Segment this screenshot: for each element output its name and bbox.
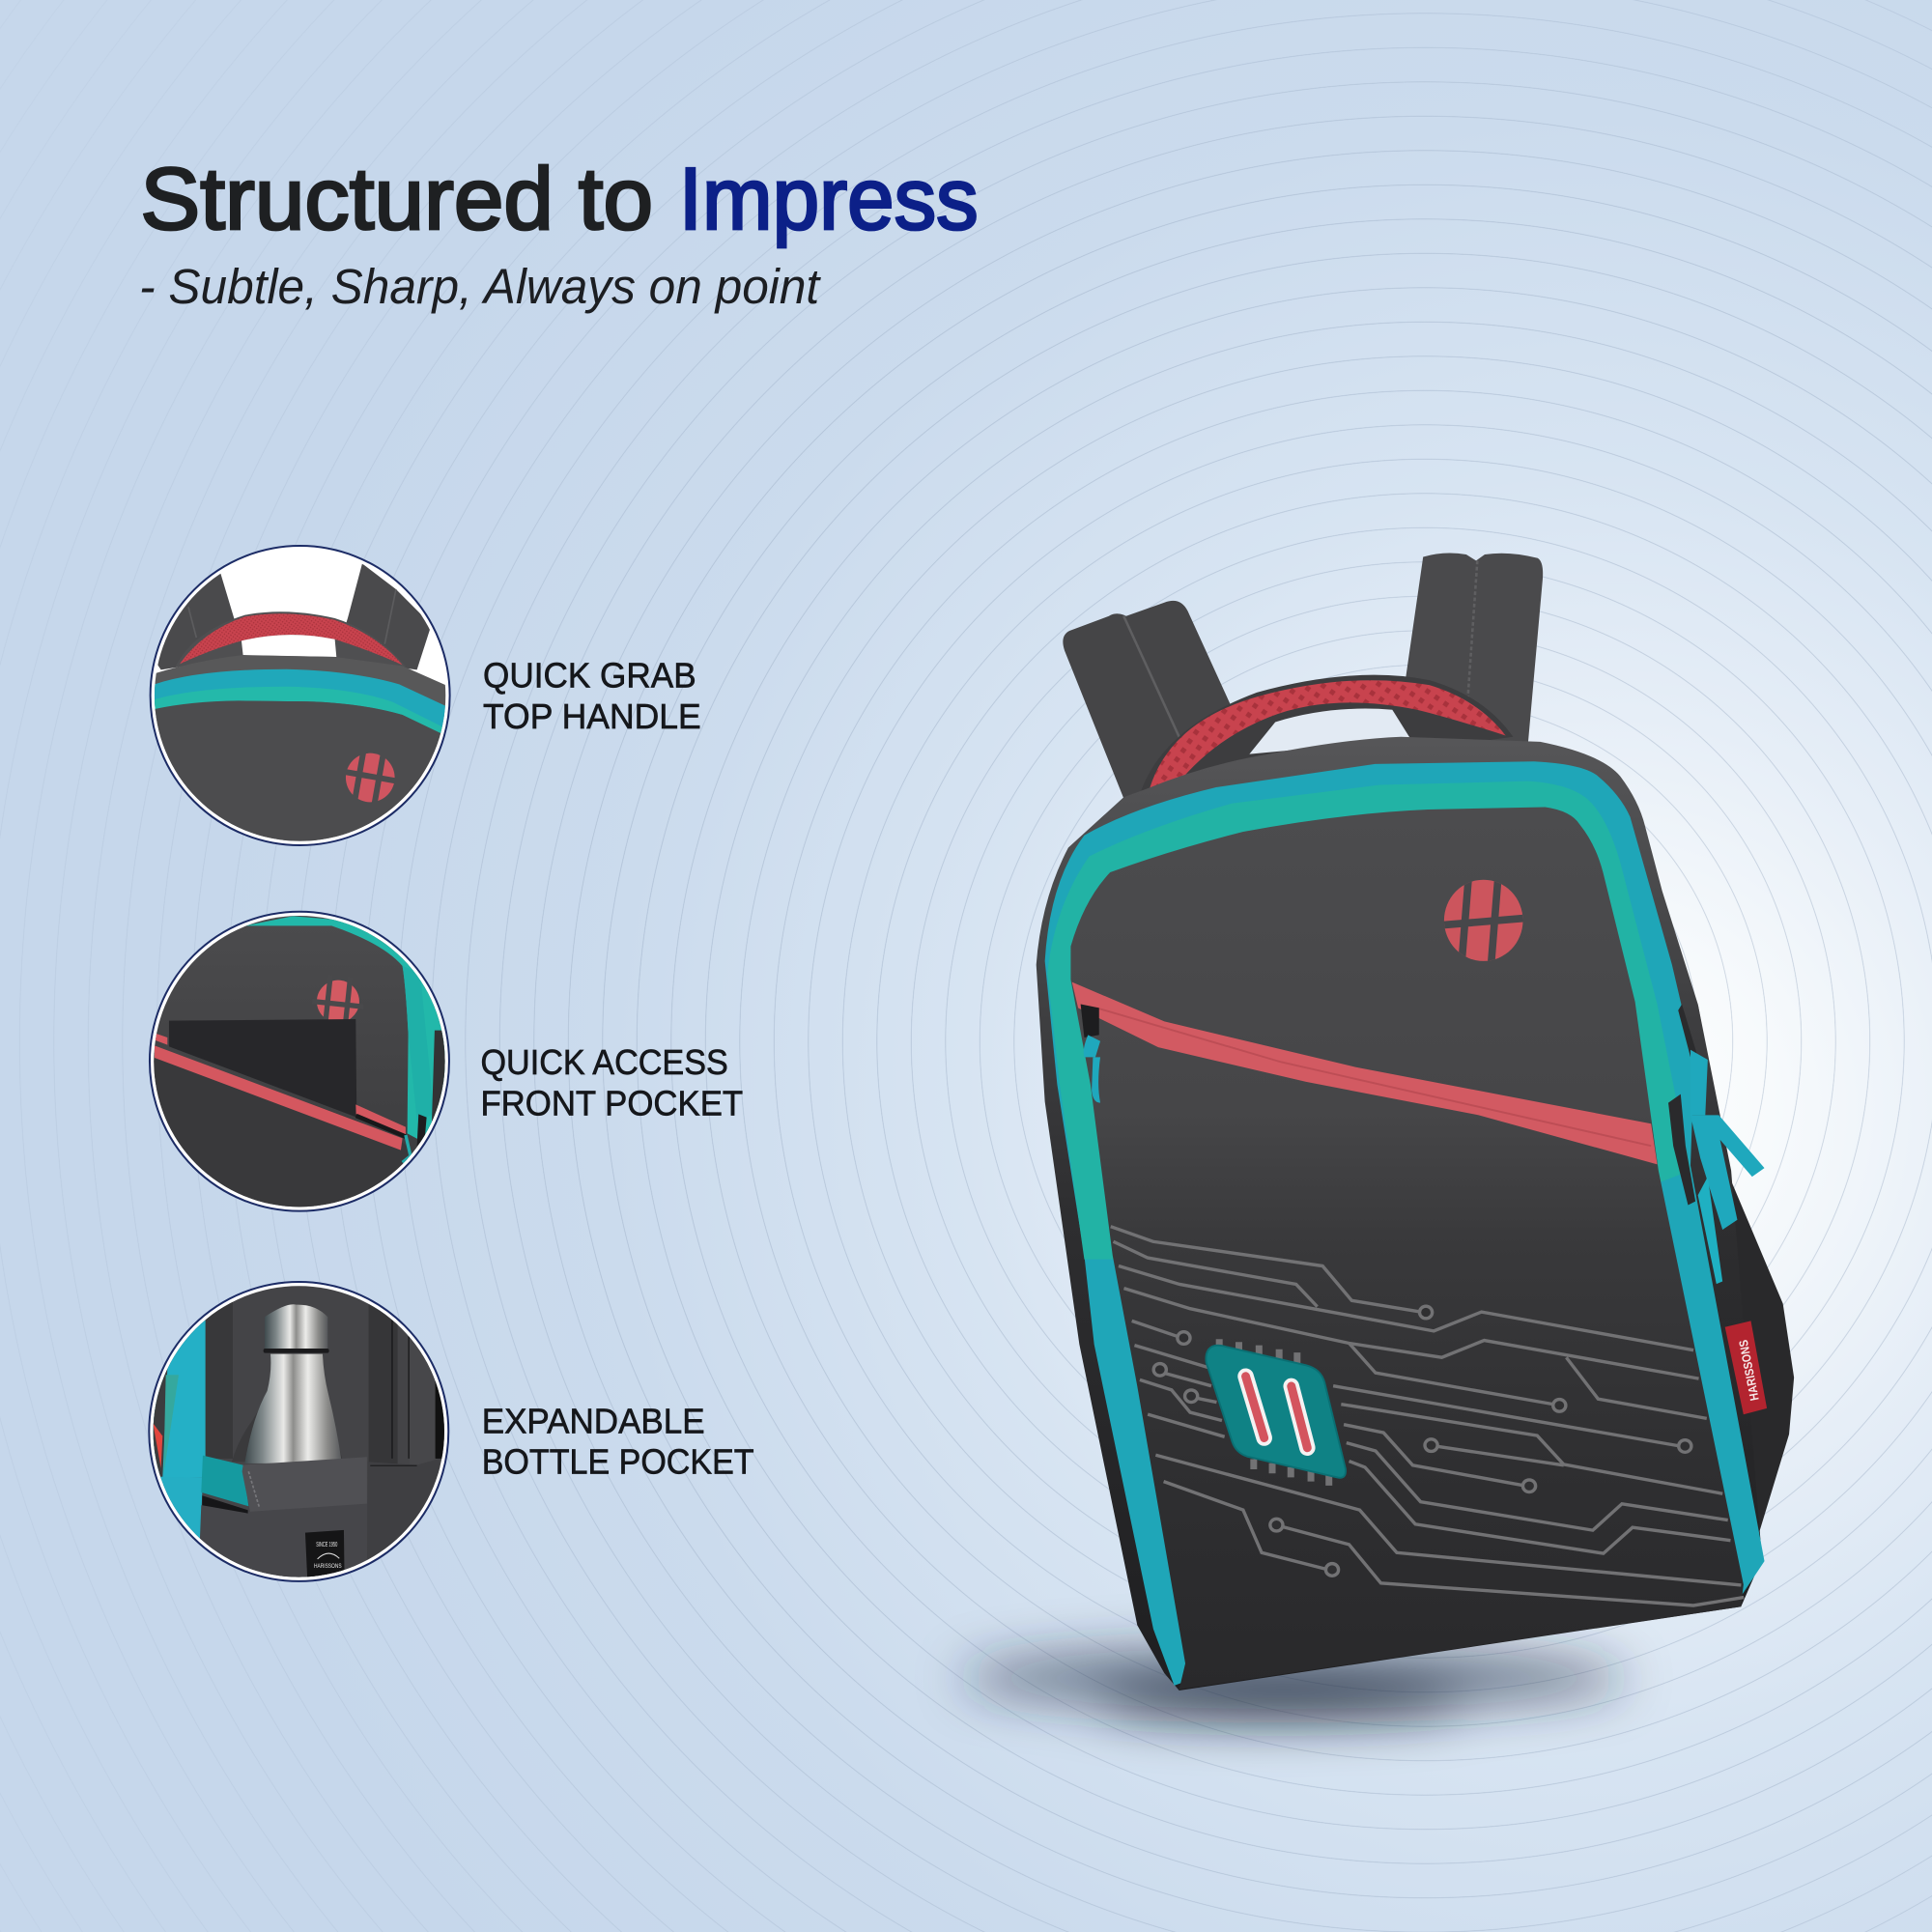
- detail: front pocket: [145, 908, 454, 1217]
- title: [140, 151, 979, 248]
- label: expandable bottle pocket: EXPANDABLE: [482, 1401, 705, 1440]
- label: quick grab top handle: [483, 656, 701, 736]
- right zipper pulls: [1668, 1005, 1765, 1284]
- title: Impress: [679, 151, 979, 248]
- right shoulder strap: [1396, 554, 1543, 746]
- pocket label: SINCE 1950: [316, 1542, 337, 1548]
- title: Structured to: [140, 151, 653, 248]
- brand side tag: HARISSONS: [1736, 1339, 1762, 1402]
- body rim: [1037, 737, 1762, 1690]
- backpack: [1037, 554, 1794, 1690]
- green inner band: [1047, 781, 1690, 1260]
- label: expandable bottle pocket: BOTTLE POCKET: [482, 1442, 754, 1482]
- brand side tag: [1725, 1321, 1767, 1414]
- detail: top handle: [145, 541, 454, 850]
- pocket label: HARISSONS: [314, 1563, 342, 1570]
- left zipper pull: [1081, 1005, 1100, 1103]
- side panel: [1698, 1005, 1794, 1576]
- label: quick access front pocket: QUICK ACCESS: [480, 1042, 728, 1082]
- label: quick grab top handle: QUICK GRAB: [483, 656, 696, 696]
- label: expandable bottle pocket: [482, 1401, 754, 1482]
- pocket label: [305, 1530, 345, 1581]
- label: quick access front pocket: FRONT POCKET: [480, 1083, 743, 1122]
- embroidered logo: [1443, 879, 1522, 961]
- floor shadow: [961, 1646, 1627, 1719]
- left shoulder strap: [1063, 601, 1252, 799]
- circuit print: [1111, 1227, 1744, 1605]
- bottle: [232, 1304, 343, 1463]
- front panel: [1070, 807, 1744, 1690]
- teal outer band: [1045, 761, 1765, 1686]
- label: quick access front pocket: [480, 1042, 743, 1122]
- top handle: [1141, 675, 1513, 791]
- coral zip strip: [1072, 982, 1658, 1164]
- label: quick grab top handle: TOP HANDLE: [483, 696, 701, 736]
- subtitle: - Subtle, Sharp, Always on point: [139, 259, 821, 314]
- detail: bottle pocket: [145, 1278, 454, 1587]
- chip patch: [1206, 1346, 1346, 1478]
